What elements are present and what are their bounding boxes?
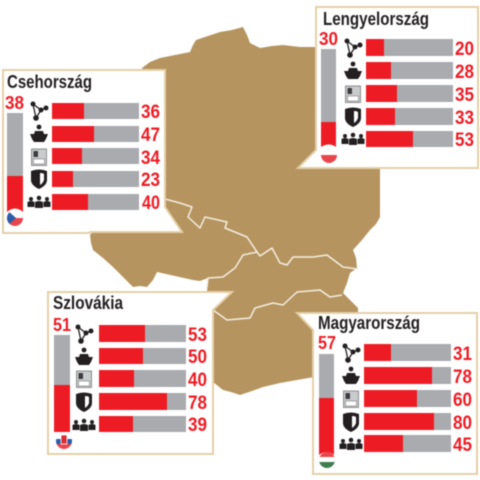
heading: Magyarország <box>318 312 420 333</box>
row: document: 60 <box>453 390 472 411</box>
heading: Lengyelország <box>323 8 429 29</box>
row: government: 28 <box>455 62 474 83</box>
row: network <box>344 38 474 60</box>
panel: Lengyelország <box>298 7 478 168</box>
overall score column: 57 <box>318 333 336 353</box>
panel background <box>297 313 477 474</box>
panel: Csehország <box>3 70 182 233</box>
overall score column <box>319 29 338 147</box>
heading: Csehország <box>7 71 92 92</box>
row: people: 45 <box>453 435 472 456</box>
row: people: 40 <box>142 193 160 214</box>
row: shield <box>76 392 207 414</box>
row: government: 78 <box>453 367 472 388</box>
row: people <box>340 435 472 456</box>
country borders <box>165 199 358 320</box>
row: network <box>30 102 160 123</box>
map landmass <box>90 27 380 395</box>
row: shield: 23 <box>141 170 160 191</box>
overall score column <box>318 333 336 455</box>
panel background <box>48 292 232 454</box>
row: government: 47 <box>141 125 160 146</box>
map: Central European countries <box>90 27 380 395</box>
row: shield: 33 <box>455 108 474 129</box>
row: shield <box>345 108 474 129</box>
row: shield <box>31 170 160 191</box>
row: network: 31 <box>453 344 472 365</box>
row: people: 39 <box>188 415 207 436</box>
row: people: 53 <box>455 130 474 151</box>
row: government <box>30 125 160 146</box>
row: network: 36 <box>141 102 160 123</box>
row: people <box>72 415 207 436</box>
row: document <box>346 85 474 106</box>
panel: Szlovákia <box>48 292 232 454</box>
row: network <box>76 324 207 346</box>
row: document: 34 <box>141 148 160 169</box>
row: government: 50 <box>188 347 207 368</box>
overall score column: 51 <box>53 315 71 335</box>
row: shield <box>343 412 472 434</box>
row: document: 40 <box>188 370 207 391</box>
row: shield: 78 <box>188 393 207 414</box>
row: people <box>342 130 474 151</box>
overall score column: 38 <box>5 93 24 113</box>
row: network <box>342 344 472 365</box>
row: people <box>28 193 160 214</box>
row: document <box>76 370 207 391</box>
row: government <box>344 62 474 83</box>
row: network: 53 <box>188 325 207 346</box>
overall score column <box>5 93 24 212</box>
heading: Szlovákia <box>53 292 124 313</box>
row: government <box>75 347 207 368</box>
row: document <box>32 148 160 169</box>
row: document: 35 <box>455 85 474 106</box>
flag: Polish <box>320 155 338 164</box>
flag: Hungarian <box>319 452 335 468</box>
row: network: 20 <box>455 39 474 60</box>
panel background <box>3 70 182 233</box>
flag: Slovak <box>55 433 73 450</box>
flag: Czech <box>7 210 23 226</box>
overall score column <box>53 315 71 432</box>
panel background <box>298 7 478 168</box>
panel: Magyarország <box>297 312 477 474</box>
row: shield: 80 <box>453 413 472 434</box>
overall score column: 30 <box>319 29 338 49</box>
row: government <box>342 367 472 388</box>
row: document <box>344 390 472 411</box>
